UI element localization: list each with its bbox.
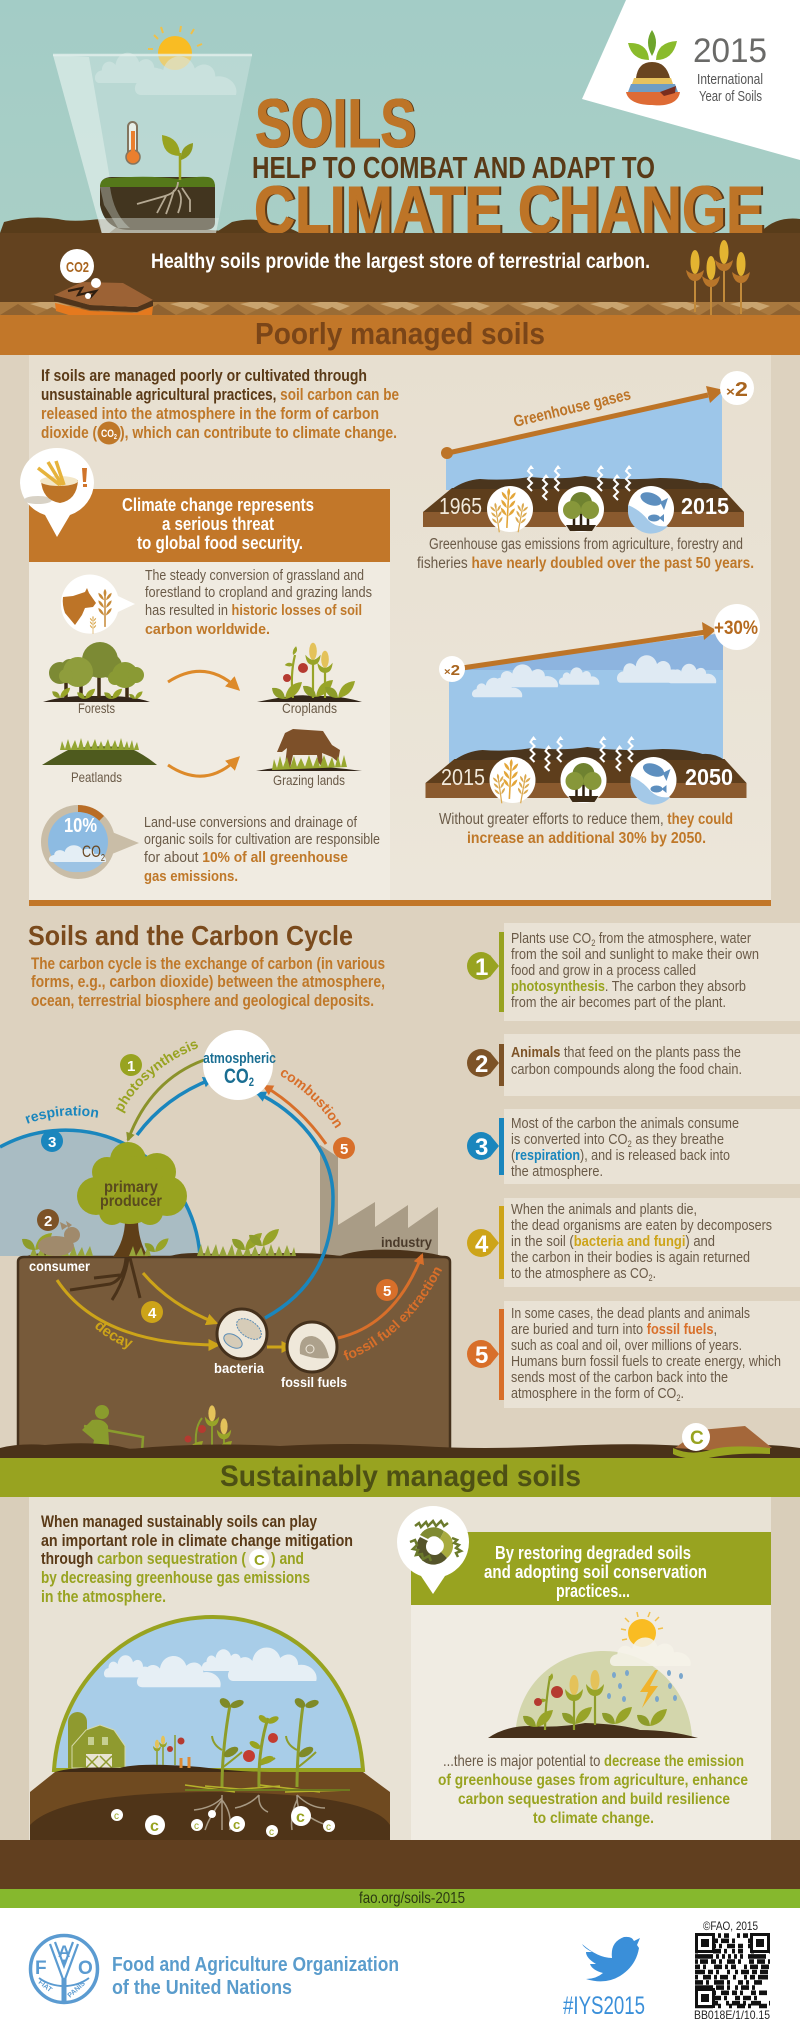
step 5: .: [681, 1385, 684, 1402]
text: major potential: ...there is major potential to decrease the emission: [443, 1753, 744, 1770]
step 4: in the soil (bacteria and fungi) and: [511, 1233, 715, 1250]
icon: leaf wreath bubble: [397, 1506, 469, 1594]
label combustion: combustion: [280, 1070, 341, 1128]
photosynthesis arrow: [128, 1060, 204, 1140]
section band: poorly managed soils: [0, 315, 800, 355]
FAO logo: [30, 1936, 98, 2002]
label decay: decay: [96, 1322, 133, 1350]
illustration: weather and crops: [488, 1612, 698, 1738]
carbon coins: [111, 1806, 335, 1837]
fossil circle: [287, 1322, 337, 1372]
foreground soil: [0, 1443, 800, 1458]
icon: 10% co2 gauge: 10%: [64, 815, 97, 837]
carbon cycle intro: The carbon cycle is the exchange of carbon (in various: [31, 955, 385, 973]
sun: [148, 26, 202, 70]
url band: fao.org/soils-2015: [359, 1890, 465, 1907]
rabbit consumer: [38, 1221, 80, 1256]
sustainable intro text: an important role in climate change mitigation: [41, 1531, 353, 1550]
bacteria circle: [217, 1309, 267, 1359]
badge 1: 1: [127, 1058, 135, 1075]
hills behind the title: [0, 218, 800, 233]
step 5: sends most of the carbon back into the: [511, 1369, 728, 1386]
caption: [417, 536, 754, 572]
corn icons: [686, 240, 750, 318]
text: major potential: carbon sequestration and build resilience: [458, 1791, 730, 1808]
intro text: ), which can contribute to climate change.: [120, 423, 397, 442]
clouds: [472, 655, 716, 697]
label photosynthesis: photosynthesis: [116, 1042, 198, 1114]
title: help to combat: HELP TO COMBAT AND ADAPT TO: [252, 150, 655, 185]
intro text: released into the atmosphere in the form of carbon: [41, 404, 379, 423]
atmospheric co2 bubble: [203, 1030, 276, 1100]
tree primary producer: producer: [100, 1193, 162, 1210]
caption: increase an additional 30% by 2050.: [467, 830, 706, 847]
year 2050: 2050: [685, 764, 733, 790]
caption: [439, 811, 733, 847]
intro text: dioxide (: [41, 423, 97, 442]
FAO logo: F: [35, 1958, 47, 1979]
badge +30%: +30%: [714, 618, 758, 639]
heading restoring: and adopting soil conservation: [484, 1562, 707, 1582]
FAO logo: FIAT: [37, 1979, 53, 1994]
icon: 10% co2 gauge: CO: [82, 842, 108, 861]
atmospheric co2 bubble: atmospheric: [203, 1050, 276, 1067]
heading restoring: [484, 1543, 707, 1601]
cracked rock with CO2 bubble: CO2: [66, 259, 89, 276]
badge 2: [37, 1209, 59, 1231]
badge x2: [720, 371, 754, 405]
caption: fisheries have nearly doubled over the past 50 years.: [417, 555, 754, 572]
factory: [320, 1145, 438, 1256]
illustration: farm dome: c: [233, 1817, 240, 1832]
panel: food security: [20, 448, 390, 900]
text: major potential: [438, 1753, 748, 1827]
sustainable intro text: in the atmosphere.: [41, 1587, 166, 1606]
step 3: [467, 1109, 800, 1184]
illustration: farm dome: c: [269, 1827, 274, 1838]
step 3: 3: [475, 1134, 488, 1161]
chart: projection 2015 to 2050: [426, 604, 760, 847]
logo caption: [697, 71, 763, 105]
icon: bowl bubble: [20, 448, 94, 537]
combustion arrow: [264, 1086, 326, 1144]
section band: sustainably managed soils: [0, 1458, 800, 1497]
intro text: unsustainable agricultural practices, soil carbon can be: [41, 385, 399, 404]
intro text: If soils are managed poorly or cultivated through: [41, 366, 367, 385]
bottom soil band: [0, 1840, 800, 1889]
logo caption: Year of Soils: [699, 88, 762, 105]
heading: soils and the carbon cycle: Soils and the Carbon Cycle: [28, 920, 353, 951]
page background: [0, 355, 800, 1460]
respiration arrow: [137, 1079, 212, 1135]
illustration: grazing cow: [256, 729, 362, 771]
carbon cycle diagram: [0, 1030, 452, 1449]
step 1: [467, 923, 800, 1021]
sustainable intro text: When managed sustainably soils can play: [41, 1512, 317, 1531]
icon: cow and wheat bubble: [61, 575, 135, 634]
badge x2: ×2: [444, 662, 460, 679]
food security heading: a serious threat: [162, 514, 274, 534]
step 3: 2: [627, 1139, 632, 1149]
sustainable panel: [29, 1497, 771, 1840]
tree primary producer: primary: [104, 1179, 158, 1196]
QR code: [695, 1933, 770, 2008]
soil layers: [30, 1772, 390, 1840]
hashtag: #IYS2015: [563, 1992, 645, 2020]
carbon cycle intro: forms, e.g., carbon dioxide) between the atmosphere,: [31, 973, 385, 991]
step 4: 4: [475, 1231, 489, 1258]
step 4: to the atmosphere as CO: [511, 1265, 679, 1282]
rock with carbon bubble: C: [690, 1428, 704, 1449]
small crops: [157, 1735, 189, 1768]
label fossil fuels: fossil fuels: [281, 1374, 347, 1390]
step 1: from the atmosphere, water: [595, 930, 751, 947]
step 4: 2: [648, 1273, 653, 1283]
atmospheric co2 bubble: CO: [224, 1065, 256, 1088]
intro text: CO: [101, 428, 118, 440]
panel: restoring soils: [397, 1506, 771, 1840]
text: historic losses: carbon worldwide.: [145, 621, 270, 638]
heading restoring: By restoring degraded soils: [495, 1543, 691, 1563]
poorly managed panel: [29, 355, 771, 900]
label respiration: respiration: [25, 1105, 98, 1124]
text: historic losses: has resulted in historic losses of soil: [145, 602, 362, 619]
clouds: [104, 1647, 317, 1687]
icon: 10% co2 gauge: 2: [101, 853, 105, 864]
badge 3: [41, 1130, 63, 1152]
step 2: Animals that feed on the plants pass the: [511, 1044, 741, 1061]
badge +30%: [714, 604, 760, 650]
step 1: 2: [591, 938, 595, 948]
main plants: [212, 1705, 316, 1787]
label peatlands: Peatlands: [71, 769, 122, 785]
text: land-use conversions: Land-use conversions and drainage of: [144, 814, 358, 831]
text: major potential: of greenhouse gases from agriculture, enhance: [438, 1772, 748, 1789]
section band: poorly managed soils: Poorly managed soils: [255, 316, 545, 351]
grass and plants: [22, 1229, 296, 1256]
tree primary producer: [77, 1142, 187, 1257]
barn and silo: [68, 1712, 125, 1768]
step 4: When the animals and plants die,: [511, 1201, 697, 1218]
step 4: [467, 1198, 800, 1287]
step 1: 1: [475, 954, 488, 981]
mulch: [185, 1785, 350, 1792]
intro text: [41, 366, 399, 444]
sky background: [0, 0, 800, 240]
sustainable intro text: through carbon sequestration (: [41, 1549, 246, 1568]
step 5: are buried and turn into fossil fuels,: [511, 1321, 717, 1338]
ground hills: [25, 1250, 446, 1257]
label forests: Forests: [78, 700, 115, 716]
thermometer: [126, 122, 140, 164]
FAO name: Food and Agriculture Organization: [112, 1954, 399, 1976]
logo year: 2015: [693, 32, 767, 70]
step 3: (respiration), and is released back into: [511, 1147, 730, 1164]
year 1965: 1965: [439, 493, 482, 519]
step 1: from the soil and sunlight to make their own: [511, 946, 759, 963]
FAO logo: O: [78, 1958, 93, 1979]
crop plants: [173, 1405, 232, 1460]
step 2: 2: [475, 1051, 488, 1078]
step 2: carbon compounds along the food chain.: [511, 1061, 742, 1078]
sustainable intro text: ) and: [271, 1549, 304, 1568]
food security heading: to global food security.: [137, 533, 303, 553]
step 5: 2: [676, 1393, 681, 1403]
print code: BB018E/1/10.15: [694, 2008, 770, 2022]
sustainable intro text: C: [254, 1552, 265, 1569]
roots: [70, 1258, 140, 1300]
icon: IYS logo: [626, 30, 680, 105]
food security heading: Climate change represents: [122, 495, 314, 515]
blue return arrow: [257, 1093, 333, 1318]
soil block with seedling: [100, 135, 215, 230]
illustration: farm dome: c: [296, 1809, 305, 1826]
heading restoring: practices...: [556, 1581, 630, 1601]
logo caption: International: [697, 71, 763, 88]
clouds in the glass: [95, 53, 236, 95]
roots: [194, 1795, 335, 1830]
label croplands: Croplands: [282, 700, 337, 716]
illustration: forests: [43, 642, 150, 702]
FAO name: of the United Nations: [112, 1977, 292, 1999]
badge 4: [141, 1301, 163, 1323]
carbon cycle intro: [31, 955, 385, 1010]
illustration: croplands: [257, 643, 362, 702]
badge 5 extraction: [376, 1279, 398, 1301]
illustration: peatlands: [42, 738, 157, 765]
label industry: industry: [381, 1234, 432, 1250]
year 2015: 2015: [441, 764, 485, 790]
badge 1: [120, 1054, 142, 1076]
glass jar: [53, 55, 252, 238]
FAO logo: PANIS: [67, 1980, 87, 1999]
illustration: farm dome: c: [114, 1811, 119, 1822]
text: historic losses: forestland to cropland and grazing lands: [145, 584, 372, 601]
year 2015: 2015: [681, 493, 729, 519]
section band: sustainably managed soils: Sustainably managed soils: [220, 1460, 581, 1493]
atmospheric co2 bubble: 2: [249, 1075, 254, 1089]
badge 4: 4: [148, 1305, 157, 1322]
step 1: from the air becomes part of the plant.: [511, 994, 726, 1011]
footer background: [0, 1908, 800, 2032]
badge 5 combustion: [333, 1137, 355, 1159]
step 1: Plants use CO: [511, 930, 608, 947]
icon: twitter bird: [582, 1937, 640, 1981]
tagline: Healthy soils provide the largest store of terrestrial carbon.: [151, 250, 650, 273]
text: land-use conversions: for about 10% of all greenhouse: [144, 849, 348, 866]
icon: 10% co2 gauge: [41, 805, 139, 879]
text: land-use conversions: organic soils for cultivation are responsible: [144, 831, 380, 848]
label fossil fuel extraction: fossil fuel extraction: [344, 1267, 442, 1360]
step 1: food and grow in a process called: [511, 962, 696, 979]
title: Soils: SOILS: [255, 85, 416, 162]
FAO logo: A: [58, 1942, 70, 1961]
intro text: 2: [114, 434, 117, 441]
arrow: forests to croplands: [168, 671, 237, 688]
label bacteria: bacteria: [214, 1360, 264, 1376]
step 3: Most of the carbon the animals consume: [511, 1115, 739, 1132]
food security heading: [122, 495, 314, 553]
url band: [0, 1889, 800, 1908]
illustration: farm dome: c: [150, 1818, 159, 1835]
step 3: is converted into CO: [511, 1131, 647, 1148]
illustration: farm dome: c: [326, 1822, 331, 1833]
rock with carbon bubble: [673, 1423, 772, 1460]
step 5: [467, 1301, 800, 1408]
label grazing lands: Grazing lands: [273, 772, 345, 788]
step 1: photosynthesis. The carbon they absorb: [511, 978, 746, 995]
brown soil band: [0, 233, 800, 302]
step 3: as they breathe: [632, 1131, 724, 1148]
badge 5 extraction: 5: [383, 1283, 391, 1300]
sustainable intro text: [41, 1512, 353, 1606]
text: land-use conversions: gas emissions.: [144, 868, 238, 885]
copyright: ©FAO, 2015: [703, 1919, 758, 1933]
step 5: atmosphere in the form of CO: [511, 1385, 709, 1402]
soil block: [18, 1257, 450, 1450]
step 5: such as coal and oil, over millions of years.: [511, 1337, 742, 1354]
cracked rock with CO2 bubble: [54, 249, 153, 320]
badge 2: 2: [44, 1213, 52, 1230]
page background lower: [0, 1497, 800, 1840]
carbon cycle intro: ocean, terrestrial biosphere and geological deposits.: [31, 992, 374, 1010]
step 5: 5: [475, 1342, 488, 1369]
chart: greenhouse gases 1965 to 2015: [417, 371, 754, 572]
step 3: the atmosphere.: [511, 1163, 603, 1180]
step 2: [467, 1034, 800, 1096]
sand strata: [0, 302, 800, 315]
trend arrow: [441, 386, 724, 459]
text: historic losses: The steady conversion of grassland and: [145, 567, 364, 584]
farmer: [82, 1405, 143, 1460]
badge 3: 3: [48, 1134, 56, 1151]
FAO name: [112, 1954, 399, 1999]
trend arrow: [462, 622, 716, 668]
step 4: the carbon in their bodies is again returned: [511, 1249, 750, 1266]
respiration dome: [0, 1130, 200, 1256]
decay arrows: [57, 1273, 291, 1347]
text: major potential: to climate change.: [533, 1810, 654, 1827]
step 4: .: [653, 1265, 656, 1282]
extraction arrow: [338, 1255, 422, 1338]
sustainable intro text: by decreasing greenhouse gas emissions: [41, 1568, 310, 1587]
text: land-use conversions: [144, 814, 380, 885]
logo corner: International Year of Soils: [582, 0, 800, 160]
step 5: In some cases, the dead plants and animals: [511, 1305, 750, 1322]
arrow: peatlands to grazing: [168, 759, 237, 776]
badge 5 combustion: 5: [340, 1141, 348, 1158]
label consumer: consumer: [29, 1258, 90, 1274]
illustration: farm dome: [30, 1617, 390, 1840]
caption: Without greater efforts to reduce them, they could: [439, 811, 733, 828]
illustration: farm dome: c: [194, 1821, 199, 1832]
arrow label: Greenhouse gases: [512, 386, 633, 431]
badge x2: [439, 656, 465, 682]
badge x2: ×2: [726, 379, 748, 401]
text: historic losses: [145, 567, 372, 638]
